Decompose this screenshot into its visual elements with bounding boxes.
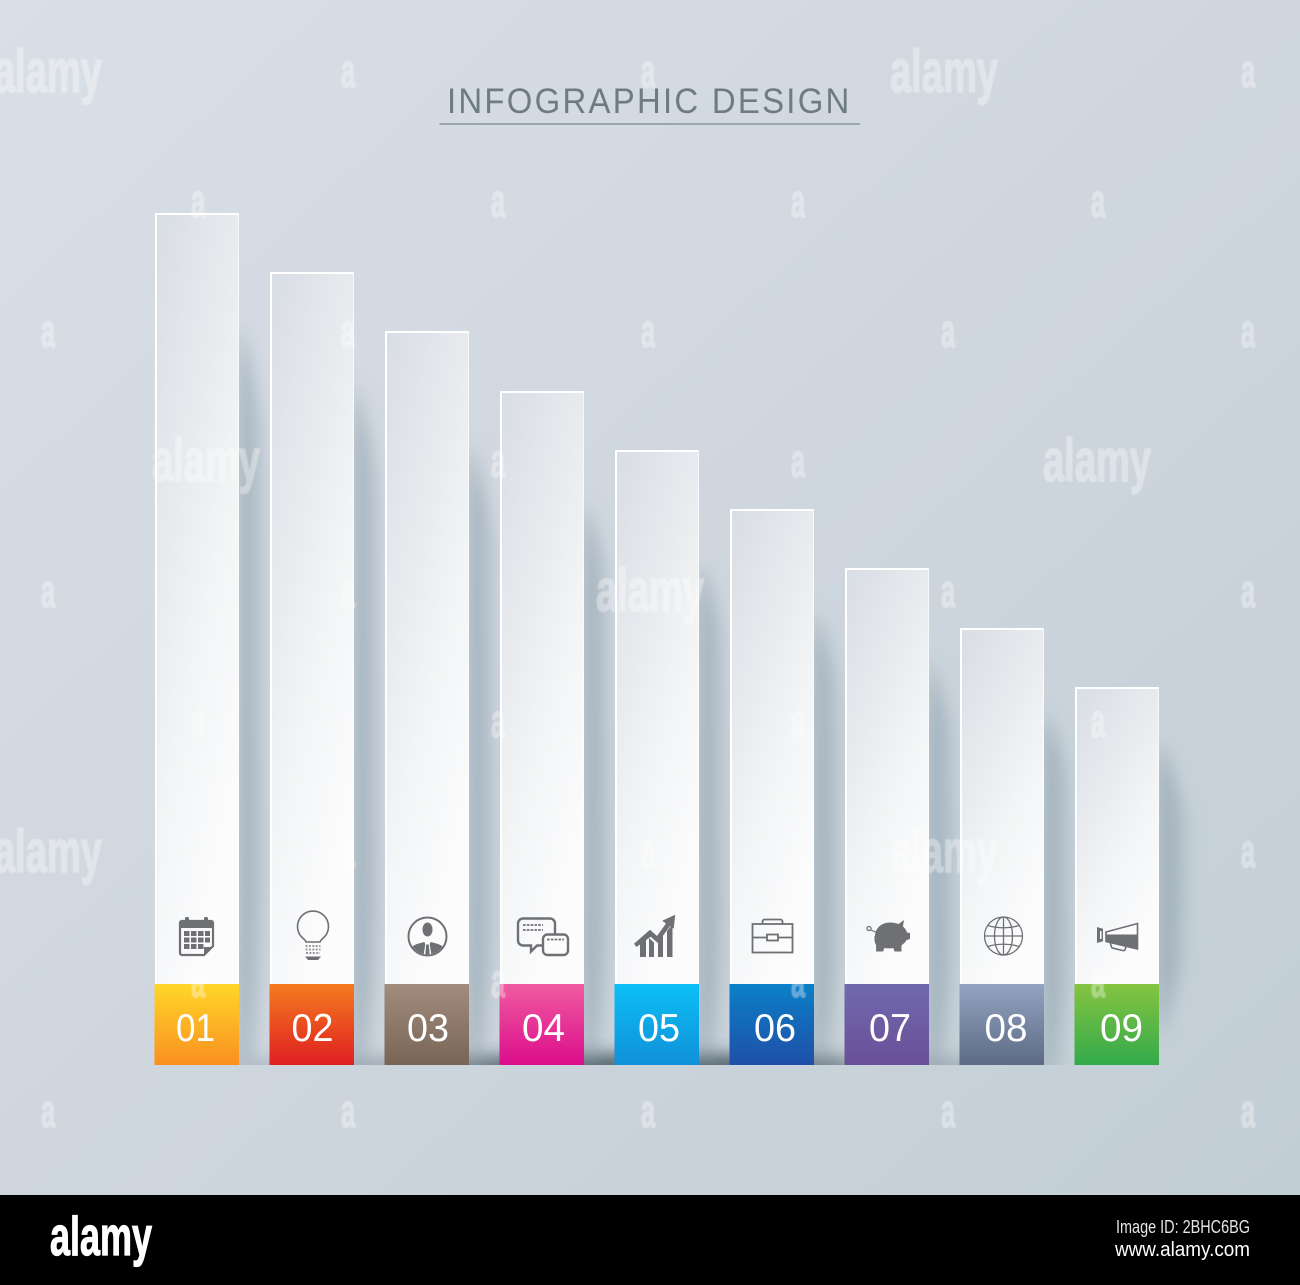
watermark: a xyxy=(341,824,355,877)
watermark: a xyxy=(1241,564,1255,617)
watermark: a xyxy=(1241,824,1255,877)
watermark: a xyxy=(41,1084,55,1137)
watermark: a xyxy=(41,304,55,357)
icon: light bulb xyxy=(297,911,328,960)
footer bar xyxy=(0,1195,1300,1285)
column 8 xyxy=(960,628,1044,1065)
column 5: 05 xyxy=(638,1007,680,1050)
watermark: alamy xyxy=(152,427,260,494)
floor shadow xyxy=(220,1056,1060,1079)
column 4: 04 xyxy=(522,1007,565,1050)
watermark: a xyxy=(641,44,655,97)
watermark: a xyxy=(791,174,805,227)
watermark: a xyxy=(1241,304,1255,357)
column 1 xyxy=(154,213,239,1065)
watermark: a xyxy=(191,694,205,747)
watermark: a xyxy=(491,174,505,227)
watermark: alamy xyxy=(596,557,704,624)
column 2: 02 xyxy=(292,1007,334,1050)
title: INFOGRAPHIC DESIGN xyxy=(447,82,849,121)
icon: growth chart xyxy=(634,915,675,957)
watermark: a xyxy=(941,304,955,357)
watermark: a xyxy=(191,174,205,227)
bar shadows xyxy=(239,320,1192,1065)
watermark: alamy xyxy=(890,818,998,885)
column 7 xyxy=(844,568,929,1065)
watermark: a xyxy=(491,694,505,747)
watermark: a xyxy=(791,434,805,487)
footer bar: Image ID: 2BHC6BG xyxy=(1116,1217,1250,1237)
watermark: a xyxy=(791,954,805,1007)
column 9: 09 xyxy=(1100,1007,1143,1050)
column 3: 03 xyxy=(407,1007,449,1050)
column 1: 01 xyxy=(176,1007,215,1050)
watermark: a xyxy=(191,954,205,1007)
watermark: a xyxy=(1091,694,1105,747)
watermark: a xyxy=(941,1084,955,1137)
watermark: a xyxy=(41,564,55,617)
icon: megaphone xyxy=(1097,924,1138,951)
watermark: a xyxy=(641,1084,655,1137)
watermark: a xyxy=(491,954,505,1007)
column 8: 08 xyxy=(984,1007,1028,1050)
watermark: a xyxy=(791,694,805,747)
column 5 xyxy=(614,450,699,1065)
icon: businessman in circle xyxy=(408,918,446,958)
watermark: a xyxy=(341,304,355,357)
watermark: a xyxy=(341,564,355,617)
column 3 xyxy=(384,331,469,1065)
watermark: a xyxy=(641,824,655,877)
watermark: a xyxy=(641,304,655,357)
watermark: a xyxy=(941,564,955,617)
watermark: a xyxy=(1241,44,1255,97)
footer bar: www.alamy.com xyxy=(1114,1239,1250,1261)
column 7: 07 xyxy=(869,1007,911,1050)
column 9 xyxy=(1074,687,1159,1065)
column 4 xyxy=(500,391,584,1065)
watermark: a xyxy=(341,44,355,97)
icon: speech bubbles xyxy=(518,918,568,955)
icon: briefcase xyxy=(752,920,792,952)
watermark: a xyxy=(1091,954,1105,1007)
watermark: a xyxy=(1091,174,1105,227)
watermark: a xyxy=(341,1084,355,1137)
watermark: alamy xyxy=(890,38,998,105)
icon: globe xyxy=(984,917,1022,955)
column 2 xyxy=(270,272,354,1065)
watermark: a xyxy=(1241,1084,1255,1137)
column 6 xyxy=(730,509,814,1065)
column 6: 06 xyxy=(754,1007,796,1050)
icon: piggy bank xyxy=(867,920,910,952)
footer bar: alamy xyxy=(50,1205,152,1267)
watermark: alamy xyxy=(1043,427,1151,494)
watermark: a xyxy=(491,434,505,487)
icon: calendar xyxy=(180,917,213,955)
